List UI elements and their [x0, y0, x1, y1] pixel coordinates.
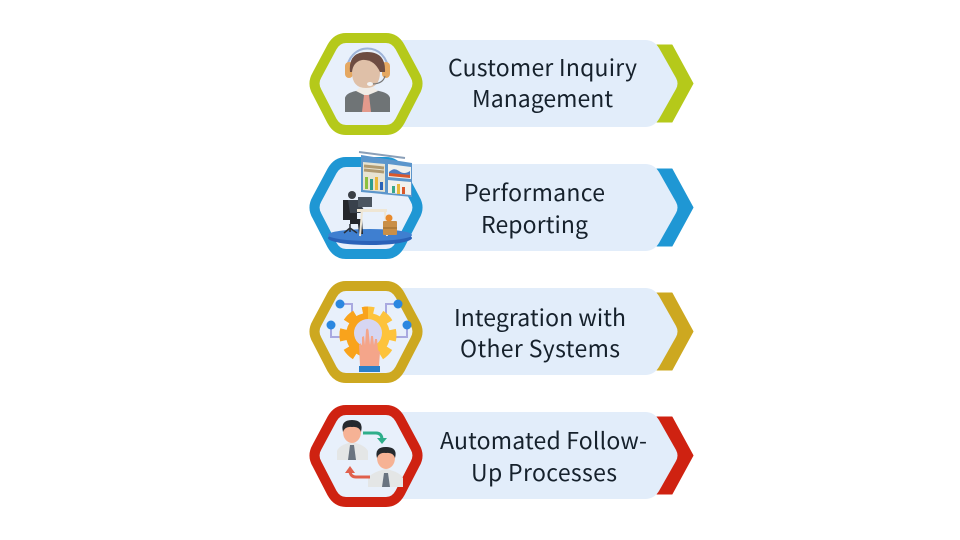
icon: gear with hand and connected nodes — [326, 300, 412, 372]
label text: Reporting — [481, 206, 588, 240]
label pill — [395, 164, 678, 251]
row 3: integration with other systems — [314, 286, 693, 378]
chevron arrow: blue — [657, 169, 693, 246]
hexagon frame: blue — [314, 162, 418, 254]
icon: support agent with headset — [345, 48, 390, 112]
row 2: performance reporting — [314, 152, 693, 254]
label text: Automated Follow- — [440, 422, 647, 456]
icon: analyst at desk with report charts — [328, 152, 412, 245]
row 4: automated follow-up processes — [314, 410, 693, 502]
chevron arrow: green — [657, 45, 693, 122]
chevron arrow: red — [657, 417, 693, 494]
label pill — [395, 288, 678, 375]
hexagon frame: red — [314, 410, 418, 502]
icon: two people exchanging follow-ups — [337, 420, 403, 487]
label text: Integration with — [454, 299, 626, 333]
label text — [454, 299, 626, 364]
label pill — [395, 412, 678, 499]
label text: Customer Inquiry — [448, 49, 637, 83]
label text: Up Processes — [471, 454, 617, 488]
label text — [440, 422, 647, 488]
label text: Performance — [464, 174, 605, 208]
hexagon frame: green — [314, 38, 418, 130]
chevron arrow: gold — [657, 293, 693, 370]
label text — [448, 49, 637, 114]
hexagon frame: gold — [314, 286, 418, 378]
label text — [464, 174, 605, 240]
row 1: customer inquiry management — [314, 38, 693, 130]
label text: Other Systems — [460, 330, 620, 364]
label pill — [395, 40, 678, 127]
label text: Management — [472, 80, 613, 114]
infographic: four feature rows — [309, 33, 694, 507]
